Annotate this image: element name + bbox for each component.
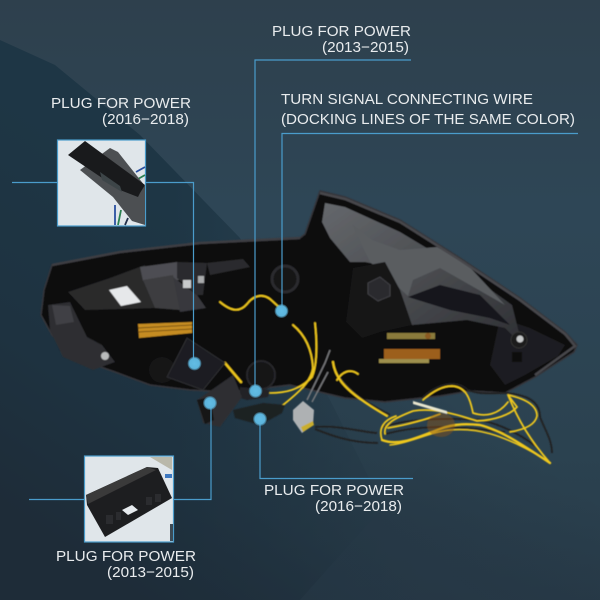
label: turn signal connecting wire: (DOCKING LINES OF THE SAME COLOR) — [281, 111, 575, 128]
bolt left — [101, 352, 109, 360]
label: left plug 2016-2018: (2016−2018) — [102, 111, 189, 128]
lamp housing outline — [41, 191, 577, 402]
label: top plug 2013-2015: (2013−2015) — [322, 39, 409, 56]
callout lines — [12, 60, 578, 500]
label: bottom plug 2016-2018: (2016−2018) — [315, 498, 402, 515]
white connector — [293, 401, 314, 433]
right tip panel — [490, 318, 565, 385]
label: bottom plug 2016-2018 — [264, 482, 404, 515]
bulb socket — [511, 332, 527, 362]
flex amber strip — [138, 322, 192, 338]
plug small — [240, 387, 270, 400]
label: turn signal connecting wire — [281, 91, 575, 128]
amber resistor — [379, 333, 440, 363]
white label — [109, 286, 141, 306]
label: top plug 2013-2015 — [272, 23, 411, 56]
white ribbon and amber connector — [413, 401, 455, 437]
upper wing grey moulding — [322, 203, 522, 345]
label: bottom-left plug 2013-2015: (2013−2015) — [107, 564, 194, 581]
plug 2013-2015 front — [197, 375, 242, 427]
label: top plug 2013-2015: PLUG FOR POWER — [272, 23, 411, 40]
label: turn signal connecting wire: TURN SIGNAL CONNECTING WIRE — [281, 91, 533, 108]
left end block — [48, 302, 115, 370]
label: bottom plug 2016-2018: PLUG FOR POWER — [264, 482, 404, 499]
mounting bolt — [368, 277, 390, 301]
label: left plug 2016-2018 — [51, 95, 191, 128]
label: left plug 2016-2018: PLUG FOR POWER — [51, 95, 191, 112]
grey wires — [307, 350, 330, 402]
rear grommets — [272, 266, 298, 292]
marker dots — [188, 304, 288, 426]
dark wires — [315, 377, 552, 453]
plug 2016-2018 flat — [233, 403, 285, 425]
label: bottom-left plug 2013-2015: PLUG FOR POWER — [56, 548, 196, 565]
left grey parts — [68, 265, 155, 310]
thumbnail: plug 2013-2015 — [84, 456, 174, 542]
plug 2016-2018 upper — [167, 338, 225, 390]
rim highlight — [52, 238, 300, 265]
yellow wires — [220, 296, 550, 463]
label: bottom-left plug 2013-2015 — [56, 548, 196, 581]
dark bolt block — [346, 262, 412, 338]
tail light assembly — [41, 191, 577, 463]
thumbnail: plug 2016-2018 — [58, 140, 146, 226]
